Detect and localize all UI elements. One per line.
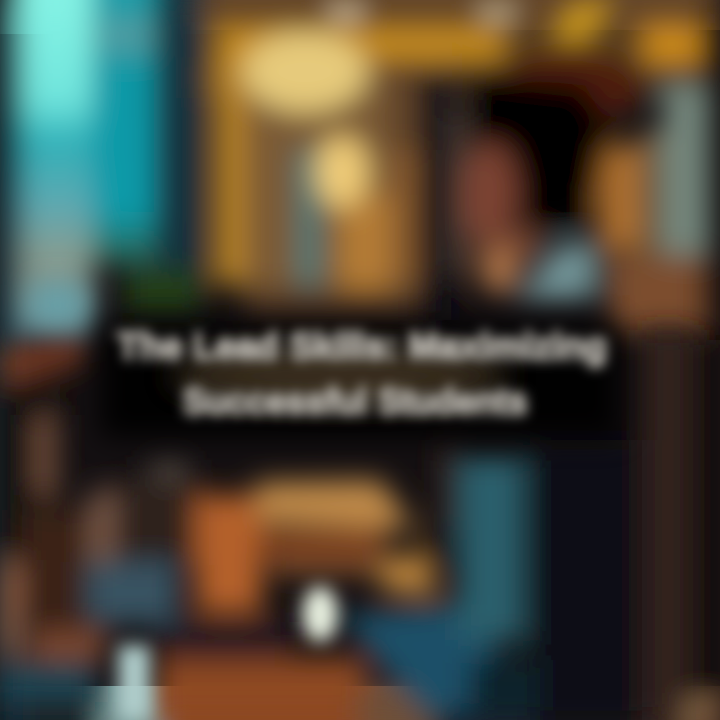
title text (illegible in the reference; approximated) [117,326,607,423]
right wall [598,145,644,250]
face [462,139,518,251]
cuff [302,586,338,642]
hair [496,52,644,124]
hands [196,495,262,613]
laptop [88,562,178,624]
table [158,658,366,720]
collar [515,242,592,300]
white strip [118,645,150,720]
dark torso [530,440,645,720]
gray object [150,460,188,520]
lower scene [0,285,720,720]
ceiling [200,0,720,28]
title banner [100,324,620,438]
left side: table edge and chair [30,285,85,325]
bright accents [118,586,338,720]
window and teal curtains [0,0,18,370]
right coat [642,330,694,720]
golden beams [214,30,246,285]
room [245,60,445,310]
lamp glow [243,32,367,112]
sleeve [340,600,500,720]
title text (illegible in the reference; approximated): The Lead Skills: Maximizing [117,326,607,368]
dark pillar [418,70,450,320]
title text (illegible in the reference; approximated): Successful Students [182,381,528,423]
centre light [316,136,368,208]
